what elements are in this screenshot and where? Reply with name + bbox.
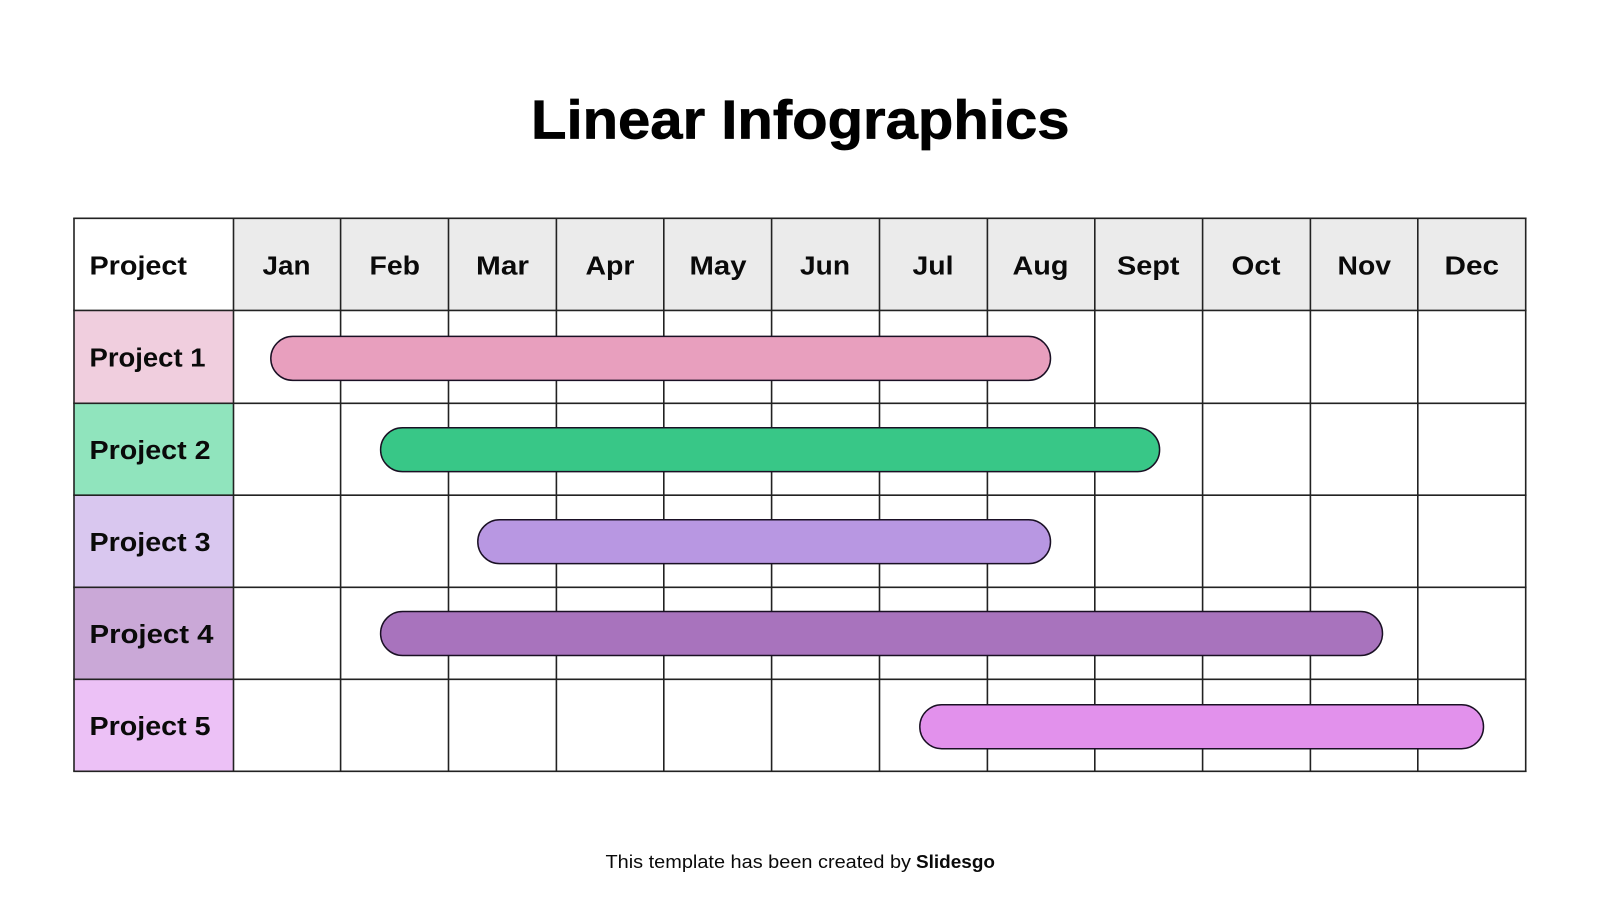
header cell: Jul bbox=[880, 218, 987, 310]
header cell: Nov bbox=[1310, 218, 1418, 310]
header cell: Sept: Sept bbox=[1117, 252, 1180, 280]
title: Linear Infographics bbox=[531, 89, 1070, 151]
row label: Project 3 bbox=[74, 495, 234, 587]
row label: Project 4 bbox=[74, 587, 234, 679]
header cell: Aug bbox=[987, 218, 1095, 310]
row label: Project 3: Project 3 bbox=[90, 529, 210, 557]
bar: Project 4 (Feb to Nov) bbox=[381, 612, 1383, 656]
header cell: Feb bbox=[341, 218, 449, 310]
header cell: Apr bbox=[557, 218, 664, 310]
bar: Project 1 (Jan to Aug) bbox=[271, 336, 1050, 380]
row label: Project 5: Project 5 bbox=[90, 713, 210, 741]
header cell: Jul: Jul bbox=[912, 252, 954, 280]
header cell: Jan bbox=[234, 218, 341, 310]
header cell: Dec bbox=[1418, 218, 1526, 310]
gantt chart bbox=[73, 218, 1527, 771]
header cell: Apr: Apr bbox=[586, 252, 635, 280]
header cell: May bbox=[664, 218, 772, 310]
header cell: Mar bbox=[449, 218, 557, 310]
row label: Project 5 bbox=[74, 679, 234, 771]
header cell: Feb: Feb bbox=[370, 252, 420, 280]
header cell: Jan: Jan bbox=[262, 252, 310, 280]
row label: Project 2 bbox=[74, 403, 234, 495]
header cell: Aug: Aug bbox=[1012, 252, 1068, 280]
bar: Project 5 (Jul to Dec) bbox=[920, 705, 1484, 749]
header cell: Mar: Mar bbox=[476, 252, 529, 280]
header row bbox=[74, 218, 1526, 310]
bar: Project 3 (Mar to Aug) bbox=[478, 520, 1050, 564]
header cell: Oct: Oct bbox=[1232, 252, 1281, 280]
row label: Project 1 bbox=[74, 310, 234, 403]
footer credit: Slidesgo bbox=[916, 852, 995, 872]
header cell: Dec: Dec bbox=[1444, 252, 1499, 280]
header cell: Jun: Jun bbox=[800, 252, 850, 280]
header cell: Jun bbox=[772, 218, 880, 310]
row label: Project 4: Project 4 bbox=[90, 621, 214, 649]
footer credit: This template has been created by bbox=[606, 852, 911, 872]
header cell: Oct bbox=[1203, 218, 1310, 310]
row label: Project 2: Project 2 bbox=[90, 437, 210, 465]
header cell: Project: Project bbox=[90, 252, 188, 280]
header cell: Sept bbox=[1095, 218, 1203, 310]
header cell: May: May bbox=[690, 252, 747, 280]
row label: Project 1: Project 1 bbox=[90, 345, 206, 373]
bar: Project 2 (Feb to Sept) bbox=[381, 428, 1160, 472]
header cell: Nov: Nov bbox=[1338, 252, 1392, 280]
header cell: Project bbox=[74, 218, 234, 310]
